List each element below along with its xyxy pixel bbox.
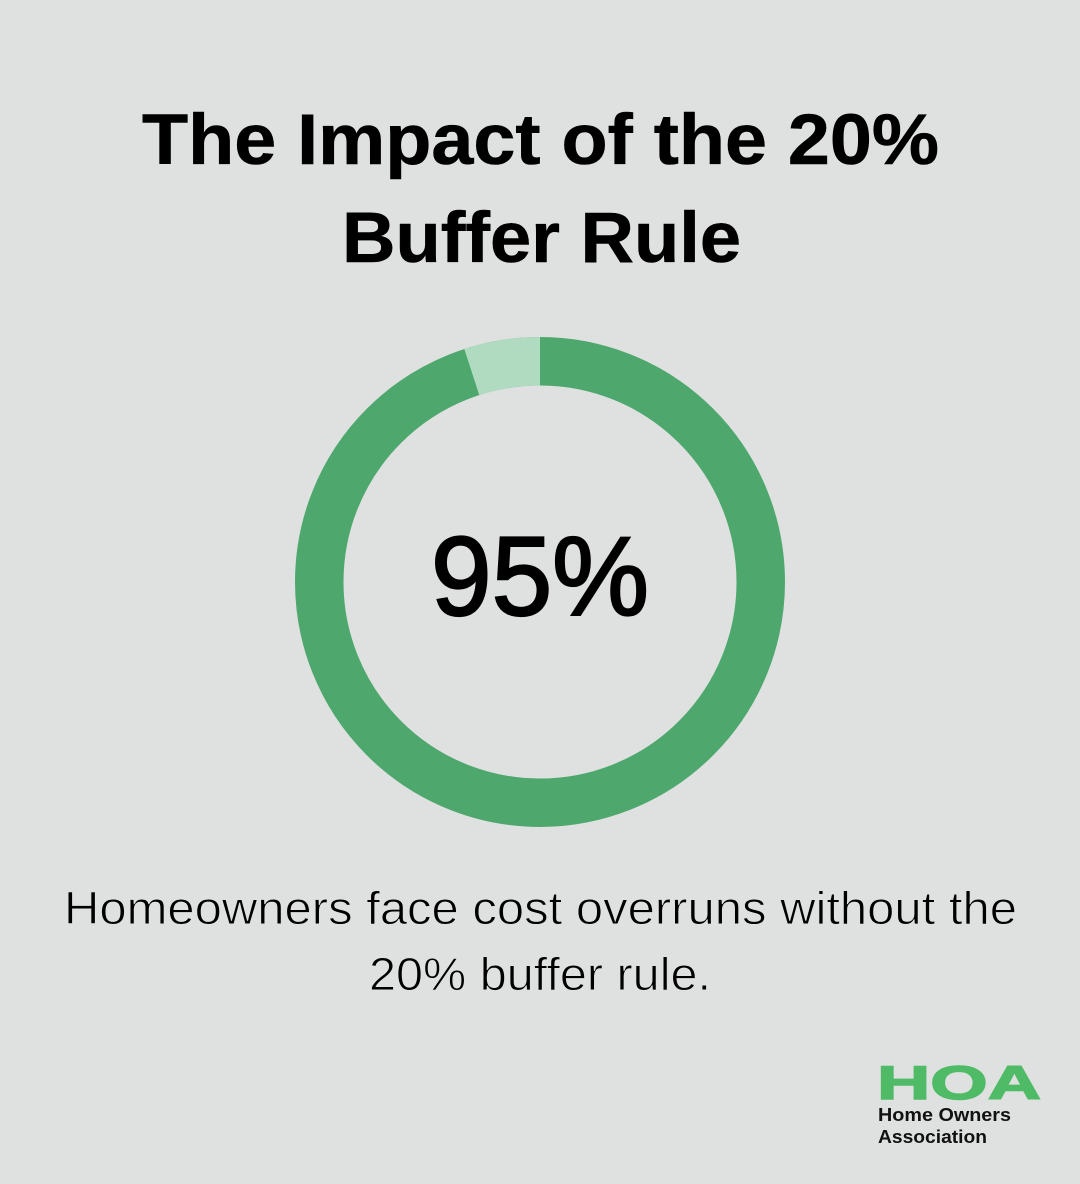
logo: Home Owners Association: Association — [878, 1126, 987, 1147]
donut value: 95% — [431, 514, 649, 639]
logo: Home Owners Association: HOA — [877, 1056, 1041, 1109]
title — [142, 101, 939, 278]
description text: Homeowners face cost overruns without the — [64, 882, 1017, 934]
title: Buffer Rule — [342, 199, 741, 278]
title: The Impact of the 20% — [142, 101, 939, 180]
description text — [64, 882, 1017, 1000]
description text: 20% buffer rule. — [369, 948, 711, 1000]
logo: Home Owners Association: Home Owners — [878, 1104, 1011, 1125]
donut chart: 95% — [319, 361, 761, 803]
logo: Home Owners Association — [877, 1056, 1041, 1147]
